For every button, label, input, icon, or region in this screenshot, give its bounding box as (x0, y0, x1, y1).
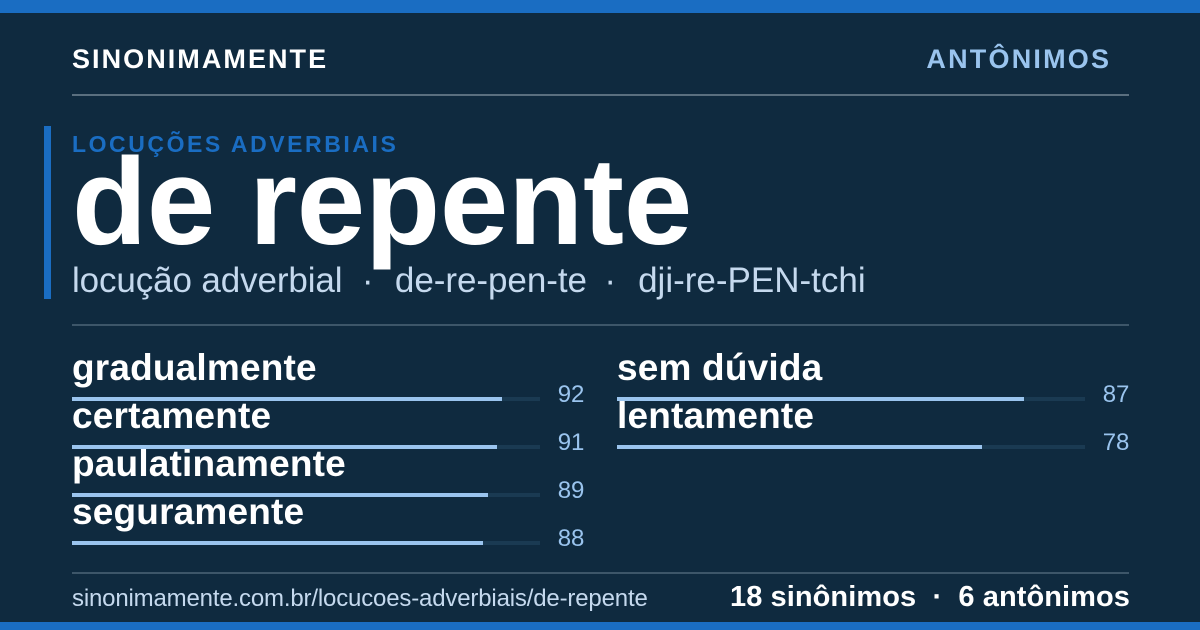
antonym: lentamente (617, 395, 1129, 456)
synonym: seguramente: 88 (558, 525, 584, 552)
synonym: seguramente (72, 491, 584, 552)
antonym list (617, 347, 1129, 456)
synonym: certamente (72, 395, 584, 456)
category label: LOCUÇÕES ADVERBIAIS (72, 131, 398, 157)
synonym: paulatinamente: paulatinamente (72, 443, 346, 484)
accent bar (44, 126, 51, 299)
antonym: sem dúvida (617, 347, 1129, 408)
pronunciation line: locução adverbial · de-re-pen-te · dji-re-PEN-tchi (72, 261, 866, 300)
brand heading: SINONIMAMENTE (72, 44, 328, 74)
main title: de repente (72, 134, 692, 271)
antonym: lentamente: 78 (1103, 429, 1129, 456)
section divider (72, 324, 1129, 326)
synonym: gradualmente (72, 347, 584, 408)
bottom bar (0, 622, 1200, 630)
footer counts: 18 sinônimos · 6 antônimos (730, 581, 1130, 613)
synonym: certamente: certamente (72, 395, 271, 436)
footer divider (72, 572, 1129, 574)
antonym: sem dúvida: 87 (1103, 381, 1129, 408)
synonym: certamente: 91 (558, 429, 584, 456)
antonym: lentamente: lentamente (617, 395, 814, 436)
antonyms link: ANTÔNIMOS (926, 44, 1111, 74)
synonym: paulatinamente: 89 (558, 477, 584, 504)
top bar (0, 0, 1200, 13)
synonym: seguramente: seguramente (72, 491, 304, 532)
antonym: sem dúvida: sem dúvida (617, 347, 822, 388)
synonym: paulatinamente (72, 443, 584, 504)
synonym: gradualmente: gradualmente (72, 347, 317, 388)
synonym: gradualmente: 92 (558, 381, 584, 408)
footer url: sinonimamente.com.br/locucoes-adverbiais/de-repente (72, 585, 648, 612)
synonym list (72, 347, 584, 552)
header divider (72, 94, 1129, 96)
